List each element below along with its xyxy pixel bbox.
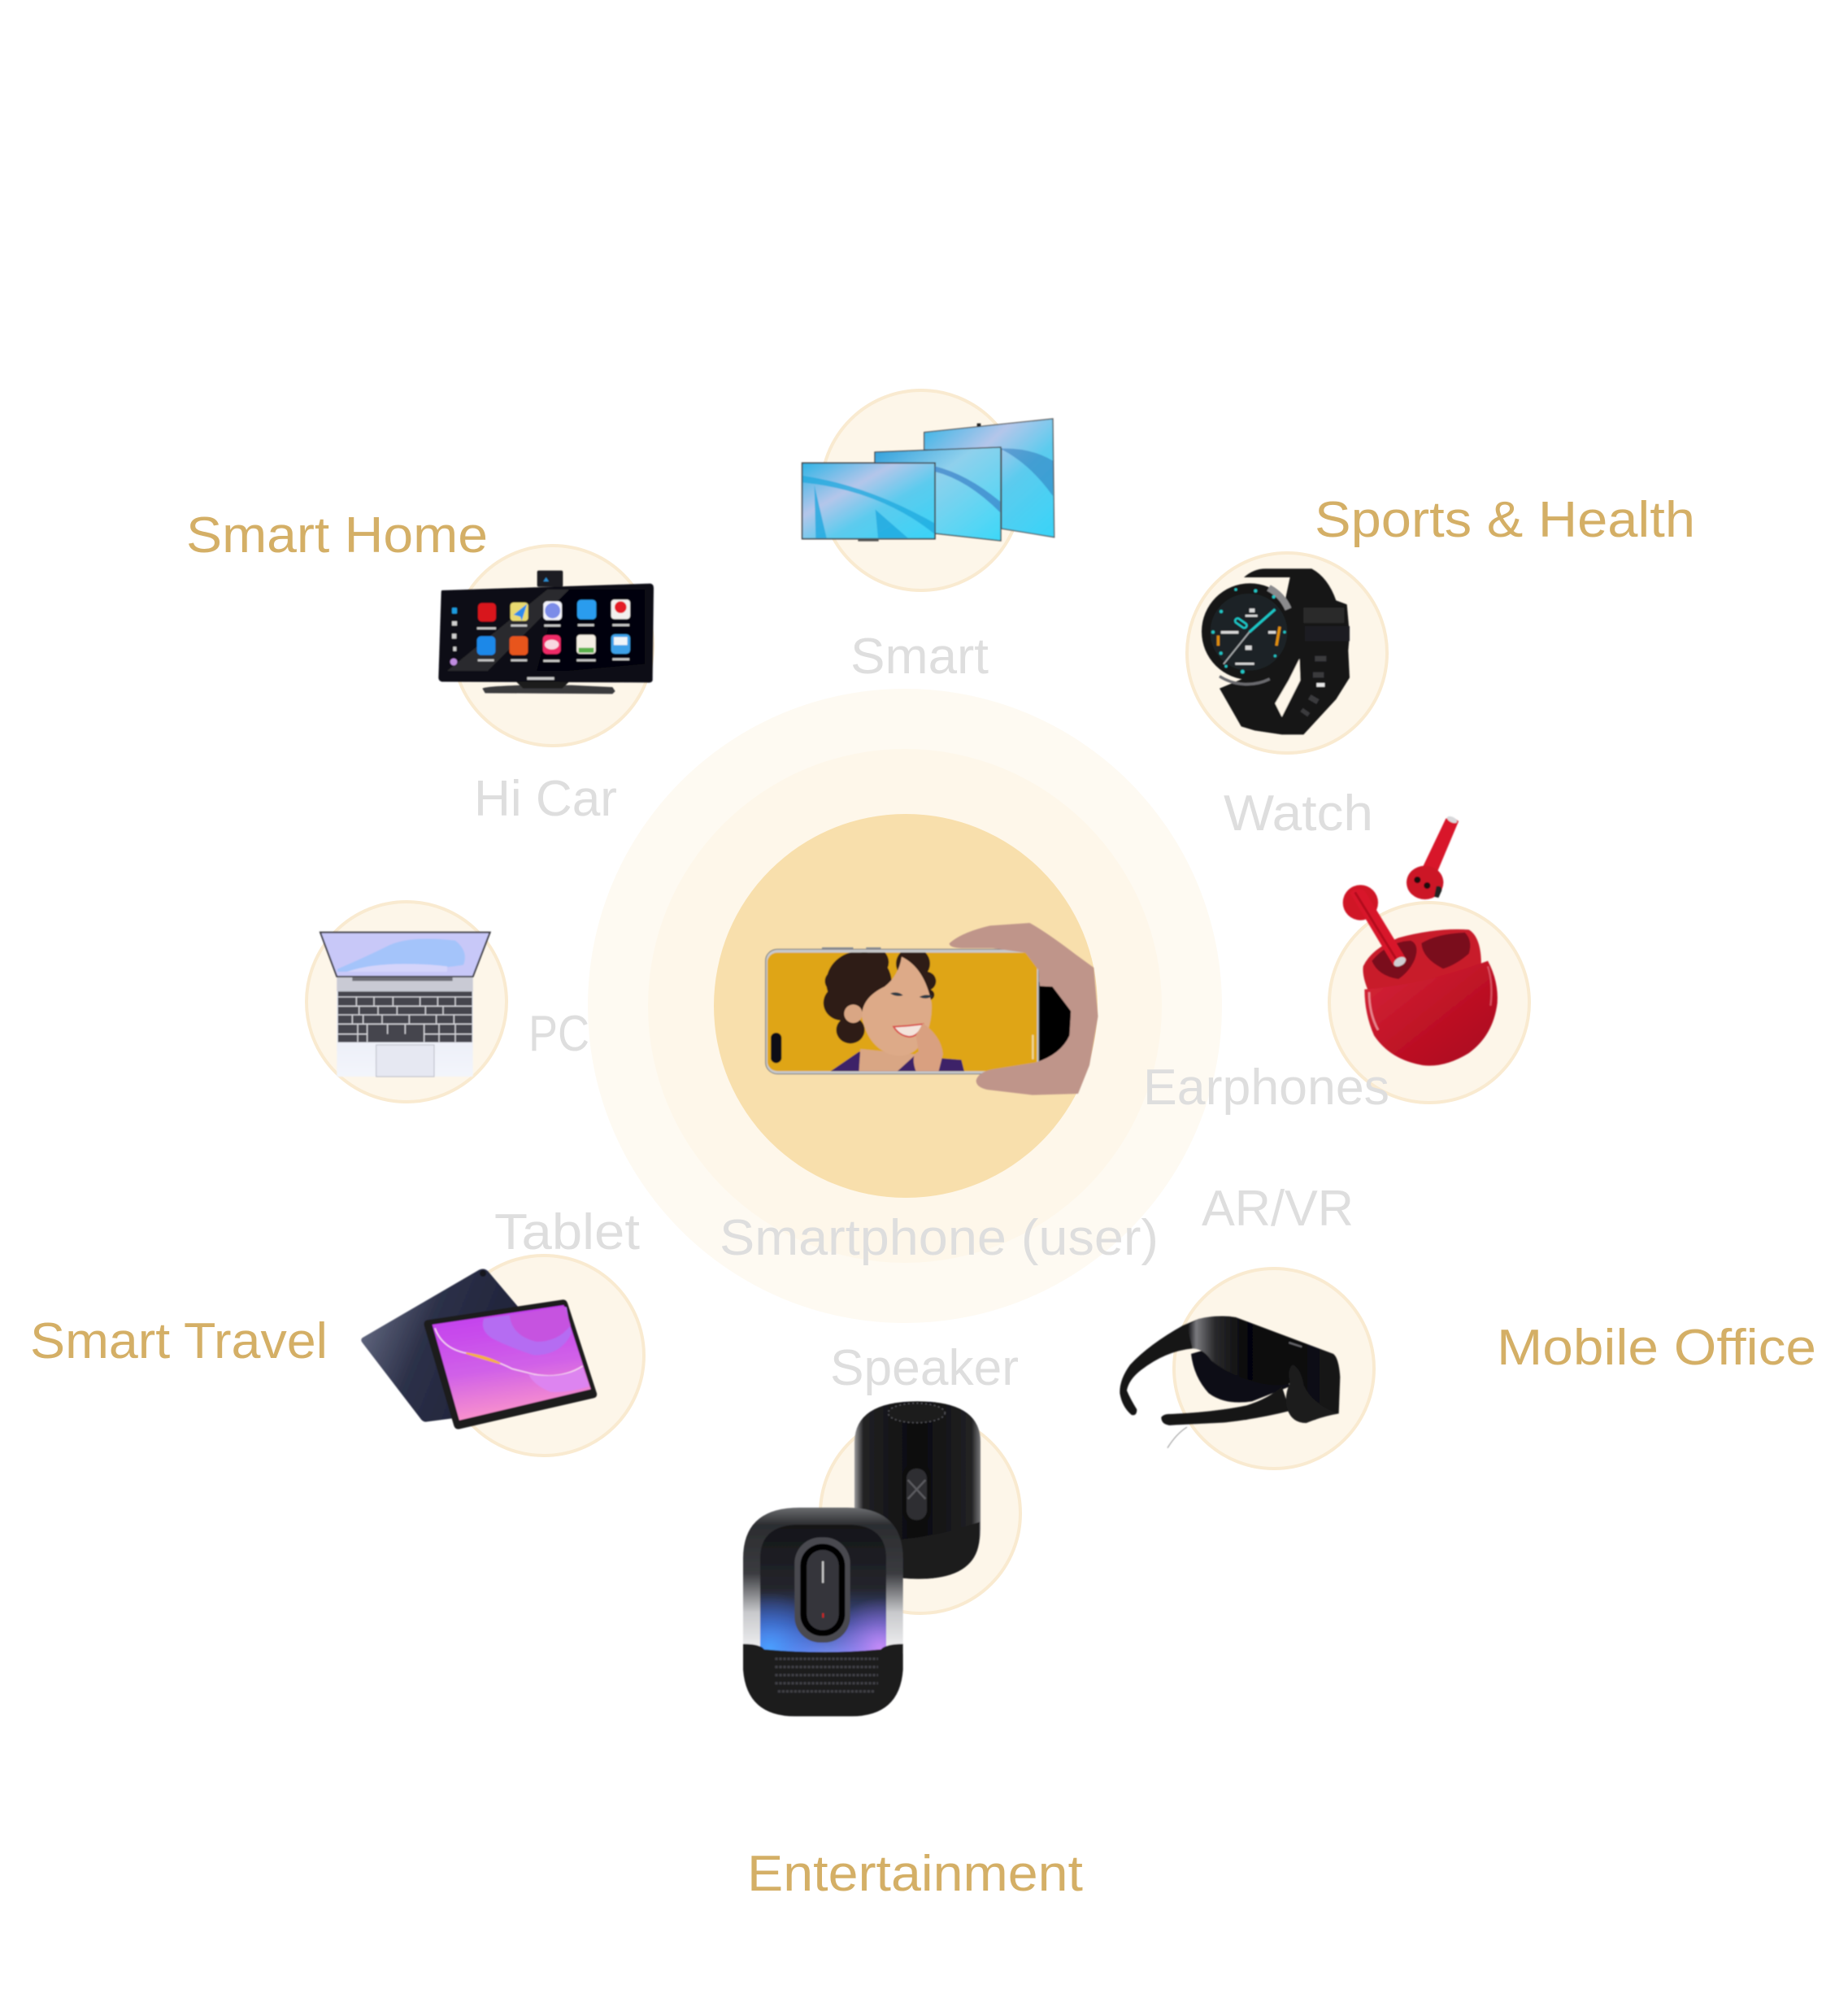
rear speaker (854, 1401, 981, 1579)
device label: Speaker: Speaker (830, 1340, 1019, 1396)
icon: Hi Car dashboard display (438, 571, 654, 694)
icon: tablets (361, 1269, 597, 1429)
icon: smartphone held in hand (766, 923, 1098, 1095)
icon: smart TVs (802, 419, 1054, 542)
icon: smart speakers (713, 1401, 981, 1717)
icon: laptop (320, 933, 490, 1077)
category label: Sports & Health: Sports & Health (1315, 492, 1695, 548)
device label: Watch: Watch (1224, 786, 1373, 842)
device label: PC: PC (528, 1006, 589, 1062)
device label: Smart: Smart (850, 629, 989, 685)
diagram: smartphone at centre of device ecosystem (33, 389, 1814, 1891)
device label: AR/VR: AR/VR (1202, 1181, 1354, 1237)
device label: Earphones: Earphones (1143, 1060, 1389, 1116)
concentric rings behind the smartphone (588, 689, 1222, 1323)
device label: Hi Car: Hi Car (474, 771, 617, 827)
device background circles (307, 390, 1529, 1613)
category label: Entertainment: Entertainment (747, 1846, 1083, 1902)
device label: Smartphone (user): Smartphone (user) (720, 1210, 1159, 1266)
category label: Smart Home: Smart Home (186, 507, 488, 564)
icon: smartwatch (1202, 568, 1350, 734)
category label: Mobile Office: Mobile Office (1497, 1320, 1816, 1376)
front speaker (713, 1508, 933, 1717)
device label: Tablet: Tablet (494, 1204, 640, 1260)
icon: red wireless earphones and case (1343, 815, 1498, 1066)
category label: Smart Travel: Smart Travel (30, 1313, 328, 1369)
icon: AR/VR glasses (1120, 1316, 1340, 1448)
